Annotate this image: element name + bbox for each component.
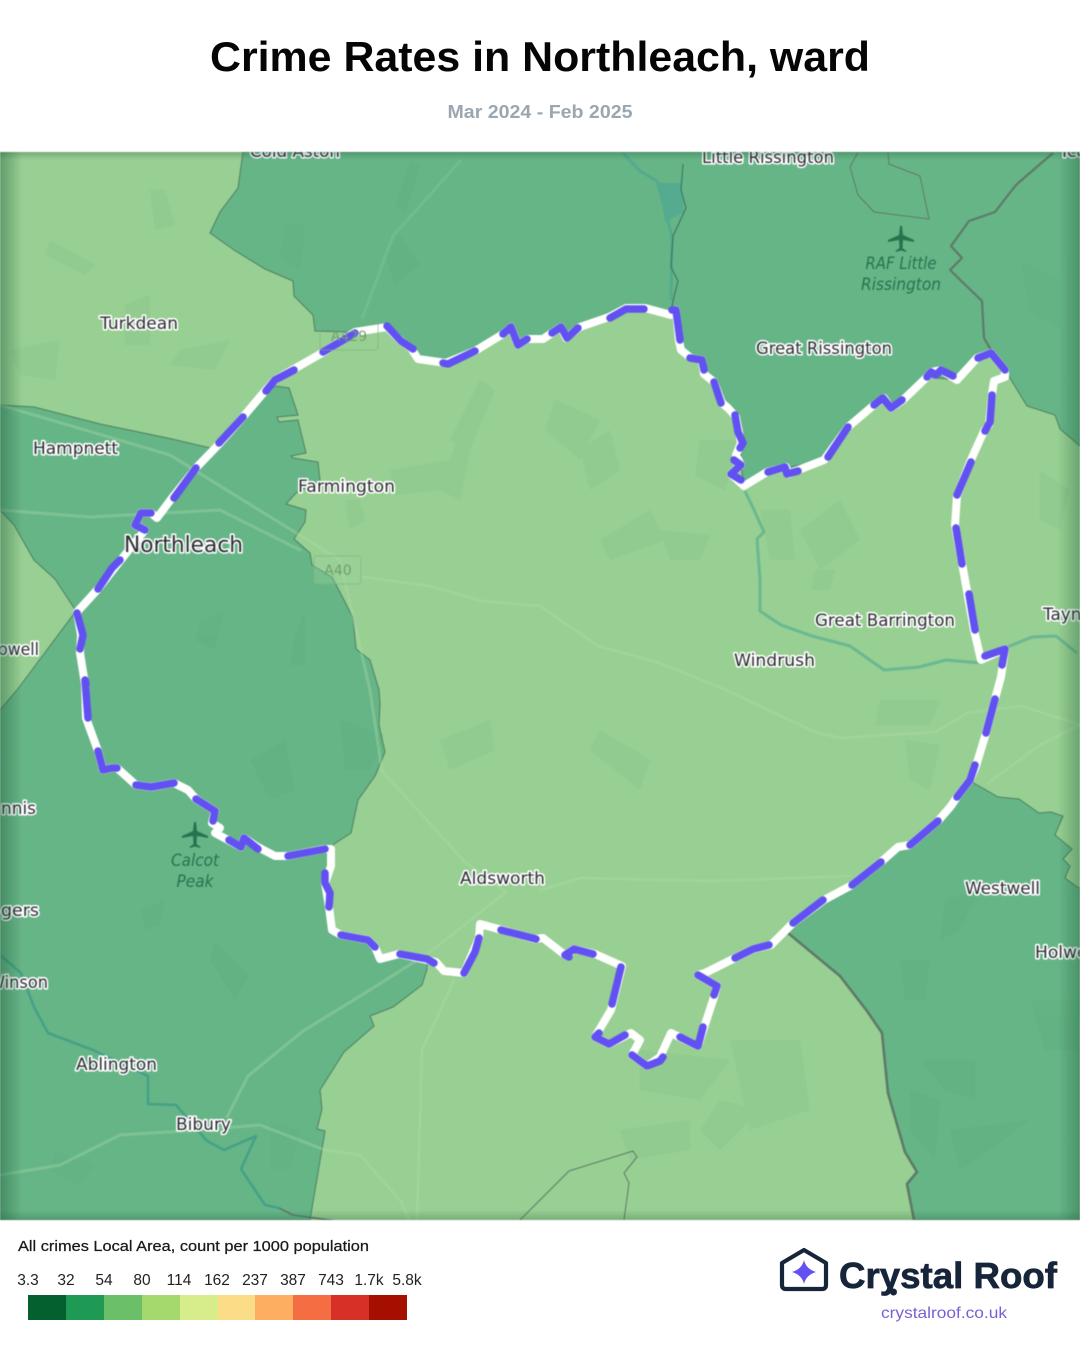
land-use patches — [10, 160, 1080, 1185]
region: darker area around Northleach — [0, 386, 427, 1220]
place labels: Westwell — [965, 879, 1040, 898]
place labels: Ablington — [76, 1055, 157, 1074]
legend scale values: 54 — [95, 1272, 113, 1289]
place labels: Aldsworth — [460, 869, 545, 888]
road north — [362, 160, 461, 319]
legend scale values: 32 — [57, 1272, 75, 1289]
legend scale values: 3.3 — [17, 1272, 39, 1289]
region: darker area around Westwell — [788, 780, 1080, 1220]
label: Calcot Peak — [171, 851, 219, 891]
lake near Little Rissington — [659, 183, 684, 222]
legend scale values: 114 — [167, 1272, 192, 1289]
map background: lighter crime-rate area — [0, 152, 1080, 1220]
place labels: Hampnett — [33, 439, 119, 458]
road shield: A40: A40 — [324, 563, 352, 579]
legend scale values: 387 — [280, 1272, 306, 1289]
label: RAF Little Rissington — [861, 254, 941, 294]
place labels: gers — [1, 901, 39, 920]
label: RAF Little Rissington: Rissington — [861, 275, 941, 294]
region: darker area to the north — [210, 152, 1080, 486]
ward boundary: white line — [77, 308, 1005, 1066]
place labels: Bibury — [176, 1115, 231, 1134]
river Windrush — [623, 153, 1077, 670]
footer — [17, 1238, 1058, 1322]
label: Calcot Peak: Calcot — [171, 851, 219, 870]
road shield: A40 — [314, 556, 361, 584]
place labels: Farmington — [298, 477, 395, 496]
legend title: All crimes Local Area, count per 1000 population — [18, 1238, 369, 1255]
place labels: Northleach — [124, 532, 243, 558]
district boundary lines — [279, 152, 1053, 1222]
place labels: Turkdean — [99, 314, 178, 333]
map — [0, 151, 1080, 1221]
header — [210, 33, 870, 122]
map edge shading — [0, 152, 1080, 1220]
icon: airfield Calcot Peak — [182, 822, 208, 848]
ward boundary: purple dashes — [77, 309, 1005, 1066]
place labels: nnis — [1, 799, 36, 818]
brand name: Crystal Roof — [839, 1255, 1058, 1296]
place labels: Great Rissington — [756, 339, 892, 358]
road shield: A429 — [320, 321, 378, 350]
river Coln — [0, 955, 279, 1208]
road shield: A429: A429 — [331, 329, 367, 345]
legend scale values: 162 — [204, 1272, 230, 1289]
label: Calcot Peak: Peak — [176, 872, 215, 891]
subtitle: date range: Mar 2024 - Feb 2025 — [448, 102, 632, 122]
place labels: Great Barrington — [815, 611, 955, 630]
icon: airfield RAF Little Rissington — [888, 226, 914, 252]
website url: crystalroof.co.uk — [881, 1305, 1008, 1322]
legend scale values: 1.7k — [354, 1272, 384, 1289]
legend scale values — [17, 1272, 422, 1289]
label: RAF Little Rissington: RAF Little — [866, 254, 936, 273]
legend colour bar — [28, 1295, 407, 1320]
legend scale values: 5.8k — [392, 1272, 422, 1289]
legend scale values: 743 — [318, 1272, 344, 1289]
place labels: Windrush — [734, 651, 815, 670]
title: Crime Rates in Northleach, ward — [210, 33, 870, 80]
legend scale values: 80 — [133, 1272, 151, 1289]
legend scale values: 237 — [242, 1272, 268, 1289]
place labels — [0, 142, 1080, 1134]
roads — [0, 405, 1080, 1220]
icon: Crystal Roof house logo — [782, 1250, 826, 1289]
